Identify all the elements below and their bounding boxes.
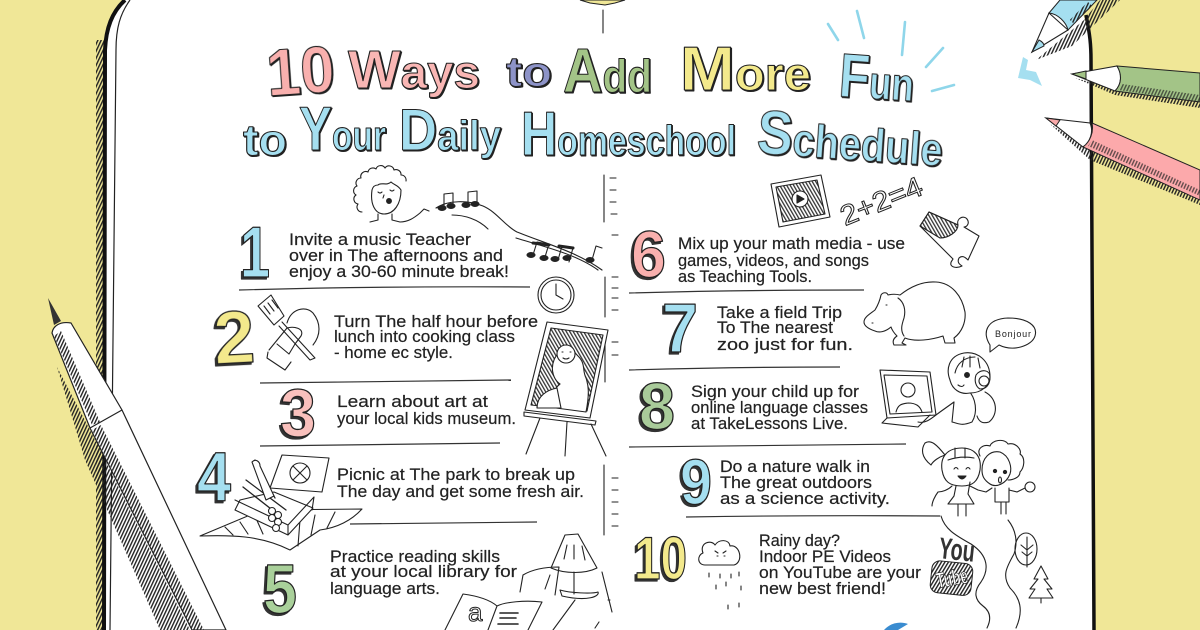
icon: pine tree [1029, 566, 1053, 603]
icon: video frame [771, 175, 830, 227]
title line 1 [264, 31, 917, 115]
text 10: Indoor PE Videos [759, 547, 891, 566]
icon: tree [1015, 533, 1037, 567]
text 10: on YouTube are your [759, 563, 921, 582]
number 4: 4 [197, 438, 231, 516]
item 1 [240, 213, 509, 293]
text 7: Take a field Trip [717, 303, 842, 322]
text 1: enjoy a 30-60 minute break! [289, 262, 509, 281]
text 3 [337, 392, 516, 428]
icon: clock [538, 277, 574, 313]
text 8: online language classes [691, 398, 868, 417]
callout: Bonjour speech bubble [986, 318, 1036, 352]
icon: lamp and open book: a [468, 597, 483, 627]
pencil: blue [1032, 0, 1120, 60]
text 7 [717, 303, 853, 354]
item 5 [263, 547, 517, 628]
title line 2: to [243, 116, 287, 165]
text 7: zoo just for fun. [717, 335, 853, 354]
number 6: 6 [631, 217, 666, 291]
text: 2+2=4: 2+2=4 [836, 171, 927, 232]
icon: girl with laptop [880, 353, 995, 427]
item 8 [639, 369, 868, 443]
icon: puzzle piece [920, 212, 979, 267]
title line 1: Add [563, 37, 652, 106]
icon: rain cloud [699, 541, 741, 609]
item 4 [197, 438, 584, 516]
icon: lamp and open book [445, 534, 599, 630]
text 3: your local kids museum. [337, 409, 516, 428]
pencil: pink [1046, 118, 1200, 205]
text 3: Learn about art at [337, 392, 488, 411]
icon: easel with portrait [524, 322, 608, 456]
item 9 [680, 446, 890, 518]
blue blob [884, 623, 908, 630]
text 6 [678, 234, 905, 286]
text 9 [720, 457, 890, 508]
title line 2 [243, 95, 945, 180]
title line 2: Your [299, 95, 386, 164]
icon: YouTube logo: You [937, 532, 977, 569]
item 10 [634, 525, 921, 598]
text 6: Mix up your math media - use [678, 234, 905, 253]
item 7 [662, 289, 853, 367]
text 7: To The nearest [717, 318, 833, 337]
icon: hippo [864, 282, 965, 345]
icon: sparkle rays [828, 11, 954, 91]
text 1 [289, 230, 509, 281]
icon: YouTube logo [929, 532, 977, 596]
title line 1: Ways [348, 40, 480, 100]
text 4 [337, 465, 584, 501]
icon: YouTube logo: Tube [934, 563, 970, 593]
text 9: Do a nature walk in [720, 457, 870, 476]
title line 1: 10 [264, 31, 337, 110]
text 2: Turn The half hour before [334, 312, 538, 331]
number 10: 10 [634, 525, 687, 592]
text 2: - home ec style. [334, 343, 453, 362]
title line 2: Homeschool [521, 100, 736, 169]
text 10: Rainy day? [759, 531, 840, 550]
text 5: Practice reading skills [330, 547, 500, 566]
bookmark tip [580, 0, 625, 5]
title [243, 31, 945, 180]
blue smudge [1018, 57, 1042, 86]
icon: picnic basket on blanket [200, 455, 362, 550]
item 6 [631, 217, 905, 291]
number 5: 5 [263, 550, 297, 628]
text 6: as Teaching Tools. [678, 267, 812, 286]
text 8 [691, 382, 868, 433]
text 9: as a science activity. [720, 489, 890, 508]
text 9: The great outdoors [720, 473, 872, 492]
text 4: The day and get some fresh air. [337, 482, 584, 501]
text 10: new best friend! [759, 579, 886, 598]
title line 1: to [506, 48, 552, 95]
number 7: 7 [662, 289, 698, 367]
text 6: games, videos, and songs [678, 251, 869, 270]
text 8: at TakeLessons Live. [691, 414, 848, 433]
item 3 [280, 375, 516, 451]
icon: spatula and oven mitt [258, 295, 319, 370]
number 3: 3 [280, 375, 316, 451]
number 2: 2 [211, 295, 257, 380]
text 2: lunch into cooking class [334, 327, 515, 346]
text 2 [334, 312, 538, 362]
number 8: 8 [639, 369, 675, 443]
title line 1: More [680, 35, 811, 104]
text 5: language arts. [330, 579, 440, 598]
title line 2: Schedule [755, 98, 945, 180]
text 1: Invite a music Teacher [289, 230, 471, 249]
pen [48, 298, 226, 630]
centre stitching [602, 10, 618, 612]
pencil: green [1072, 66, 1200, 108]
text 5 [330, 547, 517, 598]
icon: two kids and path [923, 440, 1035, 628]
text 10 [759, 531, 921, 598]
title line 1: Fun [837, 41, 917, 115]
text 1: over in The afternoons and [289, 246, 503, 265]
icon: singer with music notes [354, 166, 602, 270]
title line 2: Daily [399, 98, 502, 163]
number 1: 1 [240, 213, 270, 293]
item 2 [211, 295, 538, 380]
text 8: Sign your child up for [691, 382, 859, 401]
number 9: 9 [680, 446, 712, 518]
callout: Bonjour speech bubble: Bonjour [995, 329, 1031, 339]
text 5: at your local library for [330, 562, 517, 581]
text 4: Picnic at The park to break up [337, 465, 575, 484]
